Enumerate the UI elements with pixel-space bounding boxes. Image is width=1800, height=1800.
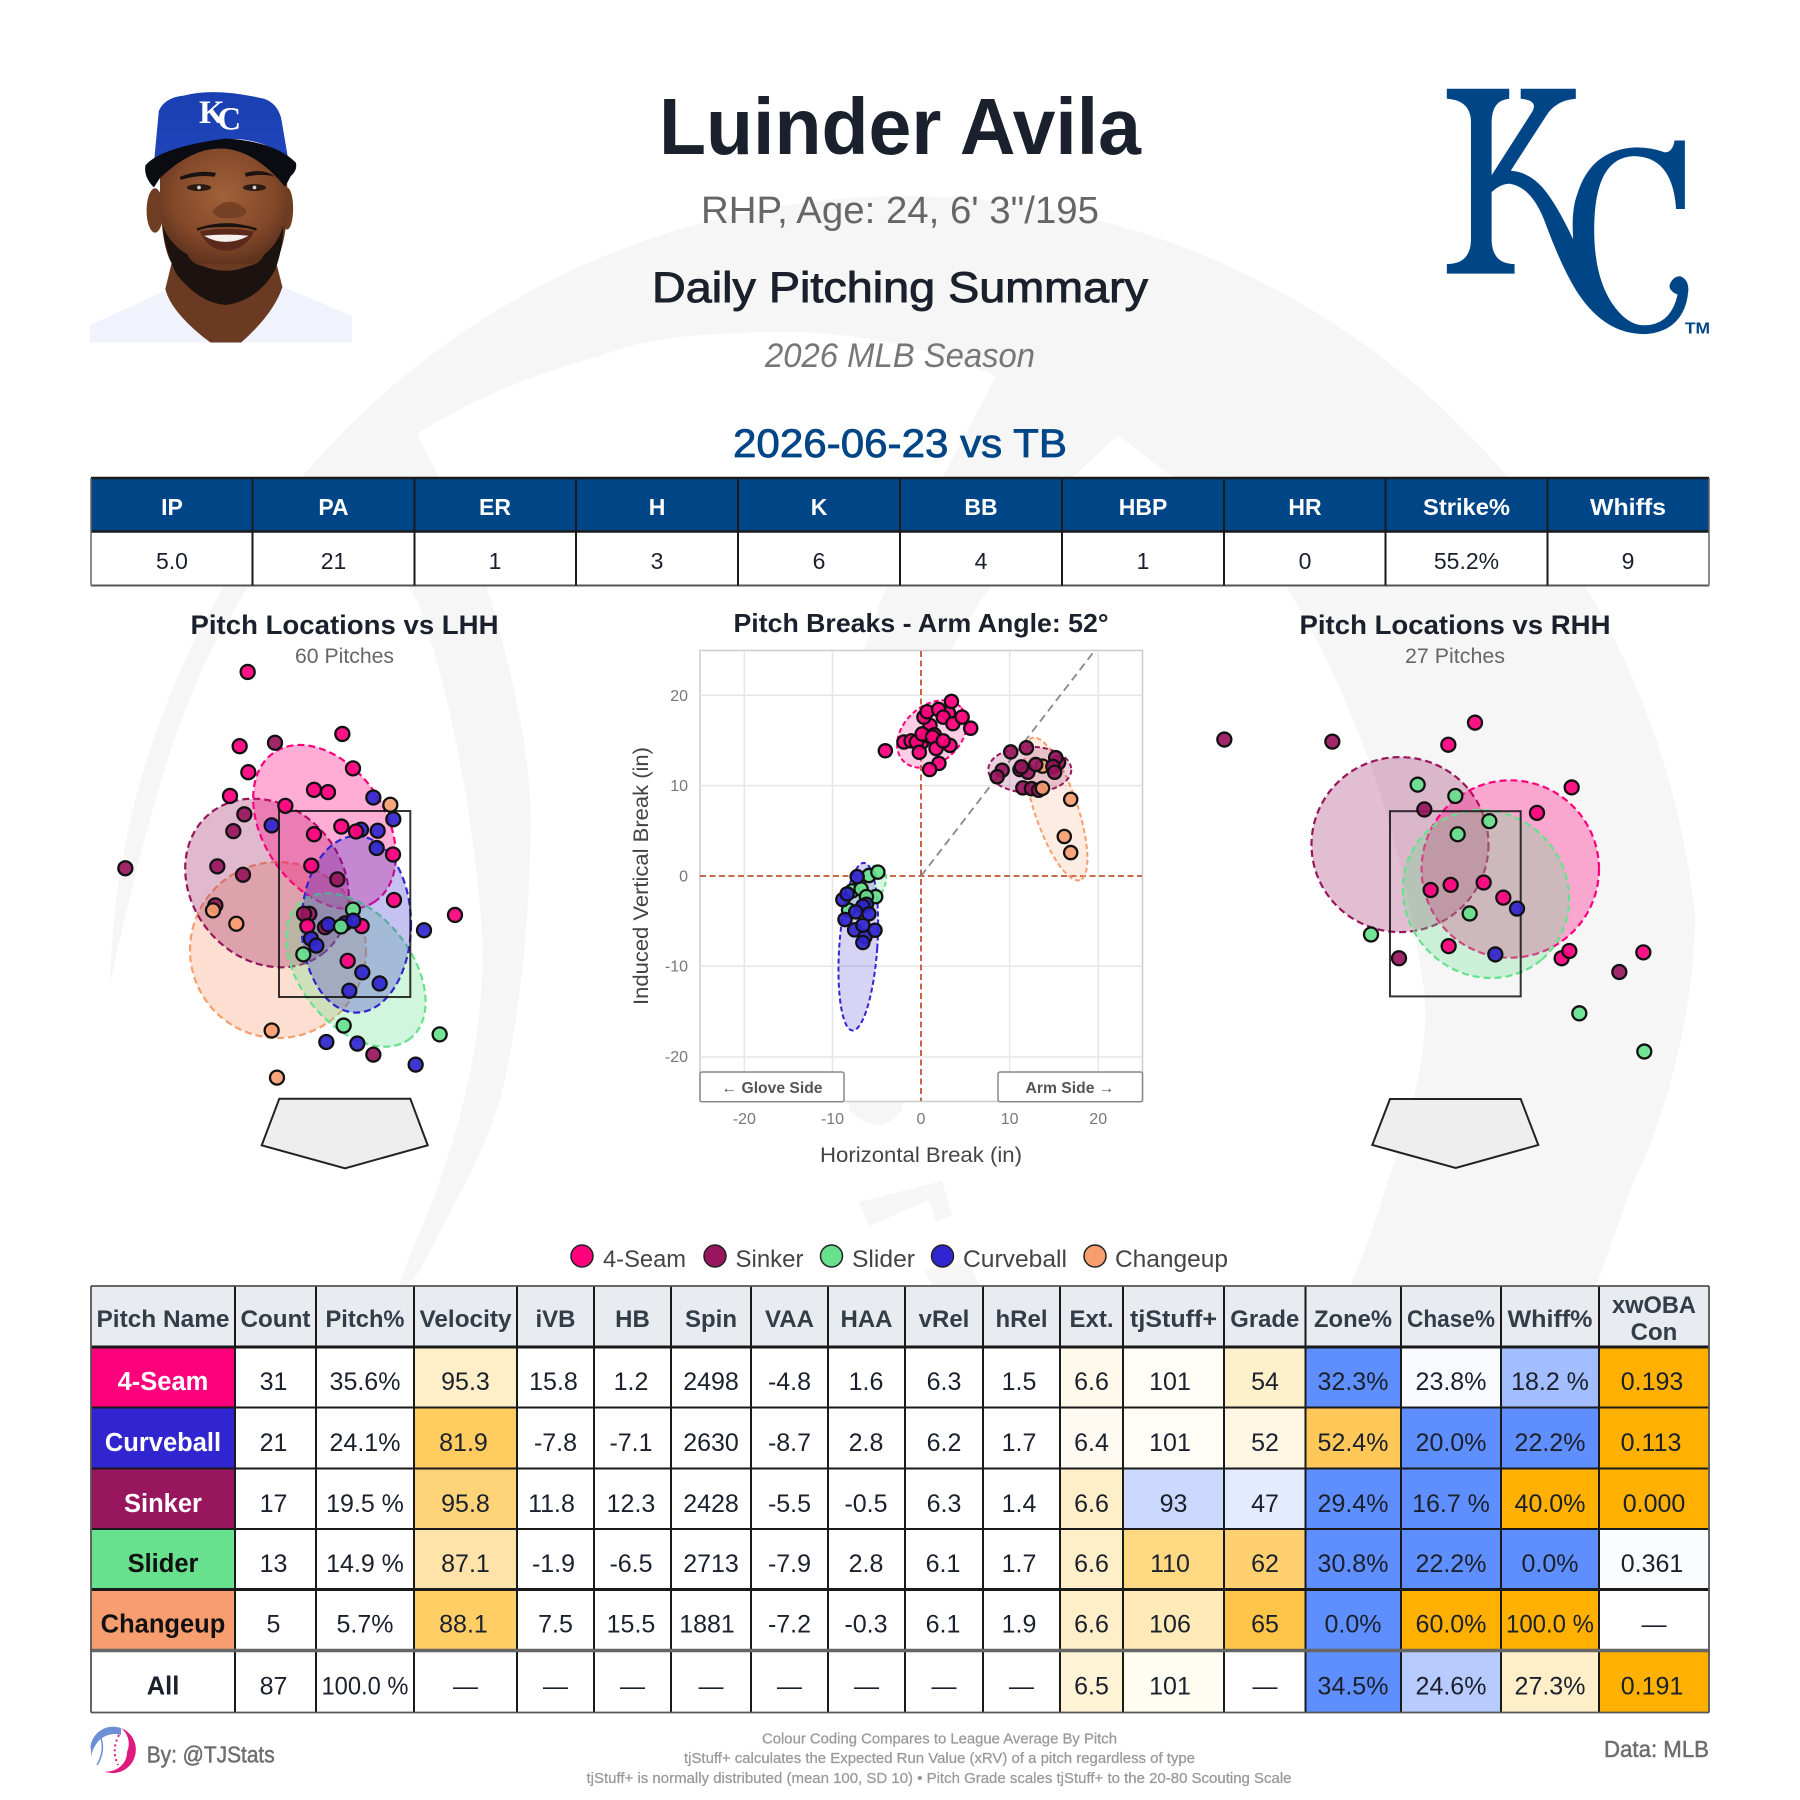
table header row: Count xyxy=(240,1306,310,1333)
row: Changeup xyxy=(101,1610,1666,1638)
row: 4-Seam: 15.8 xyxy=(529,1368,578,1396)
row: Curveball: 52.4% xyxy=(1318,1429,1388,1457)
changeup dots: LHH xyxy=(206,798,397,1085)
row: Slider: 87.1 xyxy=(441,1550,490,1578)
row: Changeup: 100.0 % xyxy=(1506,1610,1594,1638)
row: All: — xyxy=(543,1672,568,1700)
row: Curveball: -7.1 xyxy=(609,1429,653,1457)
y axis tick labels: 0 xyxy=(679,868,688,886)
curveball dots: RHH xyxy=(1488,902,1524,961)
heading: pitch breaks: Pitch Breaks - Arm Angle: 52° xyxy=(734,608,1108,638)
changeup dots: breaks xyxy=(1036,759,1077,859)
game date heading: 2026-06-23 vs TB xyxy=(733,422,1067,466)
row: Changeup: 6.1 xyxy=(926,1610,960,1638)
row: Curveball xyxy=(105,1429,1681,1457)
row: All: 0.191 xyxy=(1621,1672,1683,1700)
season label: 2026 MLB Season xyxy=(764,337,1035,375)
curveball dots: breaks xyxy=(836,870,882,949)
table grid lines xyxy=(91,1286,1709,1712)
player headshot: C xyxy=(217,101,241,137)
pitch dots: LHH xyxy=(118,665,462,1085)
game stat table: Whiffs xyxy=(1590,494,1666,520)
row: All: 87 xyxy=(260,1672,287,1700)
four-seam dots: LHH xyxy=(223,665,462,968)
row: 4-Seam: 31 xyxy=(260,1368,287,1396)
row: Changeup: 7.5 xyxy=(538,1610,573,1638)
row: 4-Seam: 1.6 xyxy=(849,1368,883,1396)
four-seam dots: RHH xyxy=(1424,716,1650,965)
footer notes: tjStuff+ calculates the Expected Run Value (xRV) of a pitch regardless of type xyxy=(684,1751,1195,1767)
density ellipses: breaks xyxy=(833,687,1100,1032)
row: All: 24.6% xyxy=(1416,1672,1486,1700)
row: Curveball: -7.8 xyxy=(534,1429,577,1457)
row: 4-Seam: 4-Seam xyxy=(118,1368,208,1396)
panel: pitch breaks xyxy=(629,608,1142,1167)
reference lines xyxy=(700,651,1142,1101)
row: Curveball: 81.9 xyxy=(439,1429,488,1457)
row: Changeup: 65 xyxy=(1251,1610,1279,1638)
row: All: — xyxy=(620,1672,645,1700)
table header row: Velocity xyxy=(420,1306,512,1333)
table header row: HB xyxy=(615,1306,650,1333)
row: 4-Seam: 23.8% xyxy=(1416,1368,1486,1396)
direction box: arm side xyxy=(998,1072,1142,1102)
row: 4-Seam: 95.3 xyxy=(441,1368,490,1396)
game stat table: 1 xyxy=(1137,548,1149,574)
table header row: Whiff% xyxy=(1508,1306,1592,1333)
row: Sinker: 19.5 % xyxy=(326,1490,404,1518)
game stat table: PA xyxy=(318,494,349,520)
row: Changeup: 0.0% xyxy=(1325,1610,1381,1638)
row: Changeup: -0.3 xyxy=(844,1610,888,1638)
row: Changeup: 106 xyxy=(1149,1610,1191,1638)
heading: LHH: Pitch Locations vs LHH xyxy=(190,610,498,640)
row: Changeup: 15.5 xyxy=(607,1610,655,1638)
player headshot: K xyxy=(199,95,225,131)
table header row: Con xyxy=(1631,1319,1677,1346)
row: Sinker: 11.8 xyxy=(528,1490,575,1518)
direction box: glove side: ← Glove Side xyxy=(722,1080,823,1097)
game stat table: BB xyxy=(964,494,998,520)
row: Changeup: 60.0% xyxy=(1416,1610,1486,1638)
x axis tick labels: -10 xyxy=(821,1111,844,1128)
footer notes: Colour Coding Compares to League Average By Pitch xyxy=(762,1732,1117,1748)
row: Slider xyxy=(128,1550,1683,1578)
table header row: vRel xyxy=(919,1306,969,1333)
legend xyxy=(571,1245,1228,1273)
row: Sinker: 47 xyxy=(1251,1490,1279,1518)
row: Curveball: 24.1% xyxy=(330,1429,400,1457)
x axis tick labels: -20 xyxy=(733,1111,756,1128)
row: Curveball: 22.2% xyxy=(1515,1429,1585,1457)
y axis tick labels: 10 xyxy=(670,778,688,795)
game stat table: 9 xyxy=(1622,548,1634,574)
row: Changeup: 1.9 xyxy=(1002,1610,1036,1638)
row: All: — xyxy=(698,1672,724,1700)
row: Changeup: 1881 xyxy=(679,1610,735,1638)
table header row: Zone% xyxy=(1314,1306,1392,1333)
row: All: — xyxy=(453,1672,478,1700)
row: All: — xyxy=(854,1672,879,1700)
x axis tick labels: 10 xyxy=(1001,1111,1019,1128)
team logo: KC xyxy=(1447,89,1710,338)
row: Sinker: 17 xyxy=(260,1490,287,1518)
row: Slider: 110 xyxy=(1150,1550,1190,1578)
row: Changeup: 5.7% xyxy=(337,1610,393,1638)
slider dots: LHH xyxy=(296,903,447,1041)
game stat table: ER xyxy=(479,494,511,520)
row: Curveball: 21 xyxy=(260,1429,287,1457)
game stat table: HBP xyxy=(1119,494,1167,520)
row: All: — xyxy=(932,1672,956,1700)
row: Slider: 22.2% xyxy=(1416,1550,1486,1578)
game stat table: 4 xyxy=(975,548,988,574)
y axis tick labels: 20 xyxy=(670,688,688,705)
row: Slider: 0.0% xyxy=(1522,1550,1578,1578)
player headshot xyxy=(90,92,352,343)
table header row: tjStuff+ xyxy=(1130,1306,1217,1333)
row: Slider: 1.7 xyxy=(1002,1550,1036,1578)
row: Curveball: 2.8 xyxy=(849,1429,883,1457)
row: 4-Seam: 35.6% xyxy=(330,1368,400,1396)
row: Changeup: 6.6 xyxy=(1074,1610,1109,1638)
row: 4-Seam: 6.6 xyxy=(1074,1368,1109,1396)
row: Slider: -1.9 xyxy=(532,1550,575,1578)
footer notes: tjStuff+ is normally distributed (mean 100, SD 10) • Pitch Grade scales tjStuff+ to the 20-80 Scouting Scale xyxy=(586,1771,1292,1787)
legend: 4-Seam xyxy=(603,1246,686,1273)
row: Sinker: 6.3 xyxy=(927,1490,961,1518)
row: 4-Seam: -4.8 xyxy=(768,1368,811,1396)
row: Changeup: 5 xyxy=(267,1610,280,1638)
row: Slider: 62 xyxy=(1251,1550,1279,1578)
slider dots: breaks xyxy=(842,865,884,917)
row: Slider: 14.9 % xyxy=(326,1550,404,1578)
row: All: 27.3% xyxy=(1515,1672,1585,1700)
row: Sinker: -0.5 xyxy=(844,1490,888,1518)
table header row: Pitch Name xyxy=(96,1306,230,1333)
legend: Changeup xyxy=(1115,1246,1228,1273)
legend: Curveball xyxy=(963,1246,1067,1273)
table cell fills xyxy=(91,1286,1709,1712)
home plate: RHH xyxy=(1372,1099,1538,1168)
row: Slider: 6.1 xyxy=(926,1550,960,1578)
row: Changeup: -7.2 xyxy=(768,1610,811,1638)
row: Sinker: Sinker xyxy=(124,1490,202,1518)
player bio: RHP, Age: 24, 6' 3"/195 xyxy=(701,190,1099,232)
sinker dots: LHH xyxy=(118,736,380,1062)
density ellipses: RHH xyxy=(1312,757,1603,1012)
row: Sinker: 93 xyxy=(1160,1490,1187,1518)
row: Sinker: 40.0% xyxy=(1515,1490,1585,1518)
subtitle: Daily Pitching Summary xyxy=(652,264,1149,312)
strike zone: RHH xyxy=(1390,811,1521,996)
row: Sinker: 1.4 xyxy=(1002,1490,1036,1518)
game stat table: Strike% xyxy=(1423,494,1510,520)
row: 4-Seam xyxy=(118,1368,1683,1396)
home plate: LHH xyxy=(262,1099,428,1168)
game stat table: IP xyxy=(161,494,183,520)
pitch metrics table xyxy=(91,1286,1709,1712)
row: Sinker: 12.3 xyxy=(607,1490,655,1518)
curveball dots: LHH xyxy=(265,790,431,1072)
legend: Sinker xyxy=(736,1246,804,1273)
row: Changeup: 88.1 xyxy=(439,1610,488,1638)
table header row: xwOBA xyxy=(1612,1292,1696,1319)
sinker dots: breaks xyxy=(991,741,1065,797)
table header row xyxy=(96,1292,1696,1346)
game stat table: 21 xyxy=(321,548,346,574)
row: All: 34.5% xyxy=(1318,1672,1388,1700)
row: Slider: 13 xyxy=(260,1550,287,1578)
pitch count: RHH: 27 Pitches xyxy=(1405,645,1505,668)
game stat table: 55.2% xyxy=(1434,548,1499,574)
overlapping cluster dots: LHH xyxy=(304,914,360,953)
table header row: Spin xyxy=(685,1306,737,1333)
game stat table: 3 xyxy=(651,548,663,574)
footer data source: Data: MLB xyxy=(1604,1736,1709,1762)
table header row: Chase% xyxy=(1407,1306,1495,1333)
table header row: Grade xyxy=(1230,1306,1299,1333)
row: Sinker: -5.5 xyxy=(768,1490,811,1518)
row: 4-Seam: 1.5 xyxy=(1002,1368,1036,1396)
row: 4-Seam: 54 xyxy=(1251,1368,1279,1396)
y axis label: Induced Vertical Break (in) xyxy=(629,747,653,1005)
panel: pitch locations vs LHH xyxy=(118,610,499,1168)
game stat table: 5.0 xyxy=(156,548,188,574)
y axis tick labels xyxy=(665,688,688,1066)
row: Slider: Slider xyxy=(128,1550,198,1578)
row: All: All xyxy=(147,1672,179,1700)
row: Changeup: Changeup xyxy=(101,1610,225,1638)
density ellipses: LHH xyxy=(151,718,454,1073)
slider dots: RHH xyxy=(1364,778,1651,1059)
row: All: — xyxy=(777,1672,802,1700)
y axis tick labels: -20 xyxy=(665,1049,688,1066)
strike zone: LHH xyxy=(279,811,410,997)
row: All xyxy=(147,1672,1683,1700)
x axis tick labels xyxy=(733,1111,1107,1128)
game stat table: K xyxy=(811,494,828,520)
row: Slider: 2.8 xyxy=(849,1550,883,1578)
sinker dots: RHH xyxy=(1217,733,1626,979)
row: Curveball: 6.4 xyxy=(1074,1429,1109,1457)
x axis tick labels: 20 xyxy=(1089,1111,1107,1128)
row: Curveball: 52 xyxy=(1251,1429,1279,1457)
title: player name: Luinder Avila xyxy=(659,82,1141,171)
row: Curveball: 101 xyxy=(1149,1429,1191,1457)
table header row: hRel xyxy=(995,1306,1048,1333)
row: Slider: -7.9 xyxy=(768,1550,811,1578)
footer notes xyxy=(586,1732,1292,1787)
legend: Slider xyxy=(852,1246,915,1273)
row: 4-Seam: 1.2 xyxy=(614,1368,648,1396)
row: Slider: -6.5 xyxy=(609,1550,653,1578)
game stat table: 6 xyxy=(813,548,825,574)
background watermark: baseball logo xyxy=(110,196,1695,1400)
row: Curveball: -8.7 xyxy=(768,1429,811,1457)
row: All: 100.0 % xyxy=(322,1672,408,1700)
direction box: arm side: Arm Side → xyxy=(1026,1080,1114,1097)
row: Curveball: 20.0% xyxy=(1416,1429,1486,1457)
pitch dots: breaks xyxy=(836,695,1077,949)
x axis tick labels: 0 xyxy=(917,1111,926,1128)
game stat table: H xyxy=(649,494,665,520)
row: All: — xyxy=(1009,1672,1034,1700)
row: 4-Seam: 32.3% xyxy=(1318,1368,1388,1396)
row: Sinker: 0.000 xyxy=(1623,1490,1685,1518)
row: 4-Seam: 2498 xyxy=(683,1368,739,1396)
row: Curveball: 1.7 xyxy=(1002,1429,1036,1457)
game stat table: HR xyxy=(1288,494,1322,520)
row: 4-Seam: 0.193 xyxy=(1621,1368,1683,1396)
game stat table: 0 xyxy=(1299,548,1311,574)
row: Slider: 0.361 xyxy=(1621,1550,1683,1578)
row: 4-Seam: 18.2 % xyxy=(1511,1368,1589,1396)
row: Sinker: 2428 xyxy=(683,1490,739,1518)
y axis tick labels: -10 xyxy=(665,958,688,976)
row: Sinker: 95.8 xyxy=(441,1490,490,1518)
footer icon: TJStats baseball logo xyxy=(90,1727,136,1773)
table header row: Ext. xyxy=(1069,1306,1114,1333)
table header row: VAA xyxy=(765,1306,814,1333)
row: Sinker xyxy=(124,1490,1685,1518)
row: All: 6.5 xyxy=(1074,1672,1109,1700)
table header row: HAA xyxy=(840,1306,892,1333)
four-seam dots: breaks xyxy=(879,695,977,776)
panel: pitch locations vs RHH xyxy=(1217,610,1651,1168)
game stat table: 1 xyxy=(489,548,501,574)
game stat table xyxy=(91,478,1709,586)
row: Curveball: 0.113 xyxy=(1621,1429,1681,1457)
row: Curveball: Curveball xyxy=(105,1429,221,1457)
row: 4-Seam: 101 xyxy=(1149,1368,1191,1396)
row: Curveball: 2630 xyxy=(683,1429,739,1457)
row: 4-Seam: 6.3 xyxy=(927,1368,961,1396)
table header row: Pitch% xyxy=(326,1306,404,1333)
row: Changeup: — xyxy=(1642,1610,1666,1638)
row: All: — xyxy=(1252,1672,1278,1700)
pitch count: LHH: 60 Pitches xyxy=(295,645,394,668)
row: Sinker: 16.7 % xyxy=(1412,1490,1490,1518)
team logo: KC: TM xyxy=(1685,321,1710,338)
row: Sinker: 6.6 xyxy=(1074,1490,1109,1518)
table header row: iVB xyxy=(535,1306,576,1333)
row: Slider: 30.8% xyxy=(1318,1550,1388,1578)
x axis label: Horizontal Break (in) xyxy=(820,1143,1022,1167)
pitch dots: RHH xyxy=(1217,716,1651,1059)
row: Curveball: 6.2 xyxy=(927,1429,961,1457)
row: Slider: 6.6 xyxy=(1074,1550,1109,1578)
row: Sinker: 29.4% xyxy=(1318,1490,1388,1518)
heading: RHH: Pitch Locations vs RHH xyxy=(1300,610,1610,640)
row: All: 101 xyxy=(1149,1672,1191,1700)
row: Slider: 2713 xyxy=(683,1550,739,1578)
chart frame and grid xyxy=(700,650,1142,1102)
direction box: glove side xyxy=(700,1072,844,1102)
footer credit: By: @TJStats xyxy=(147,1742,275,1768)
